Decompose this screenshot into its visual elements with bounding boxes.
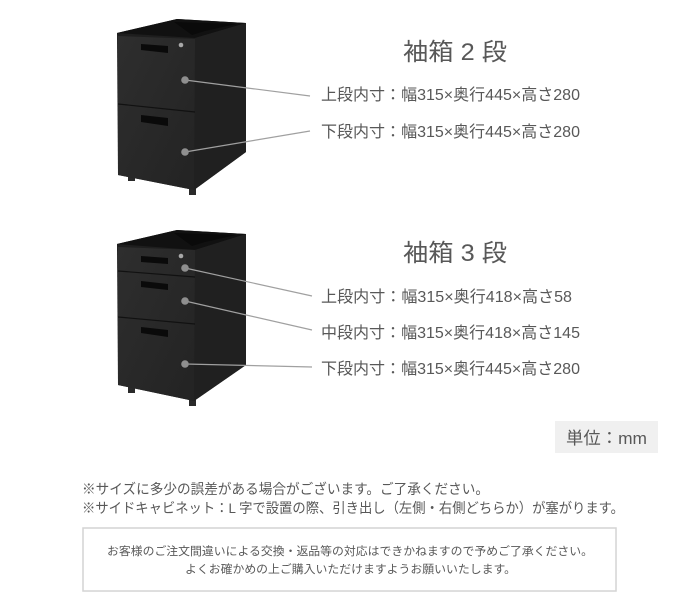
text: upper drawer inner size: 上段内寸：幅315×奥行445×高さ280 bbox=[321, 86, 580, 104]
text: bottom drawer inner size: 下段内寸：幅315×奥行445×高さ280 bbox=[321, 360, 580, 378]
leader line: lower drawer bbox=[181, 131, 310, 156]
leader line: middle drawer bbox=[181, 297, 312, 330]
panel: three-drawer cabinet bbox=[117, 230, 580, 406]
unit label bbox=[555, 421, 658, 453]
heading: three-drawer: 袖箱 3 段 bbox=[403, 240, 507, 267]
unit label: 単位：mm bbox=[566, 429, 647, 448]
text: notes bbox=[82, 481, 624, 516]
leader line: upper drawer bbox=[181, 76, 310, 96]
callout: order mistake notice: お客様のご注文間違いによる交換・返品等の対応はできかねますので予めご了承ください。 bbox=[107, 544, 593, 558]
callout: order mistake notice: よくお確かめの上ご購入いただけますようお願いいたします。 bbox=[185, 562, 516, 576]
text: top drawer inner size: 上段内寸：幅315×奥行418×高さ58 bbox=[321, 288, 572, 306]
leader line: bottom drawer bbox=[181, 360, 312, 368]
icon: three-drawer cabinet illustration bbox=[117, 230, 246, 406]
leader line: top drawer bbox=[181, 264, 312, 296]
panel: two-drawer cabinet bbox=[117, 19, 580, 195]
heading: two-drawer: 袖箱 2 段 bbox=[403, 39, 507, 66]
text: lower drawer inner size: 下段内寸：幅315×奥行445×高さ280 bbox=[321, 123, 580, 141]
text: notes: ※サイドキャビネット：L 字で設置の際、引き出し（左側・右側どちらか）が塞がります。 bbox=[82, 500, 624, 516]
text: middle drawer inner size: 中段内寸：幅315×奥行418×高さ145 bbox=[321, 324, 580, 342]
icon: two-drawer cabinet illustration bbox=[117, 19, 246, 195]
text: notes: ※サイズに多少の誤差がある場合がございます。ご了承ください。 bbox=[82, 481, 489, 497]
callout: order mistake notice bbox=[83, 528, 616, 591]
